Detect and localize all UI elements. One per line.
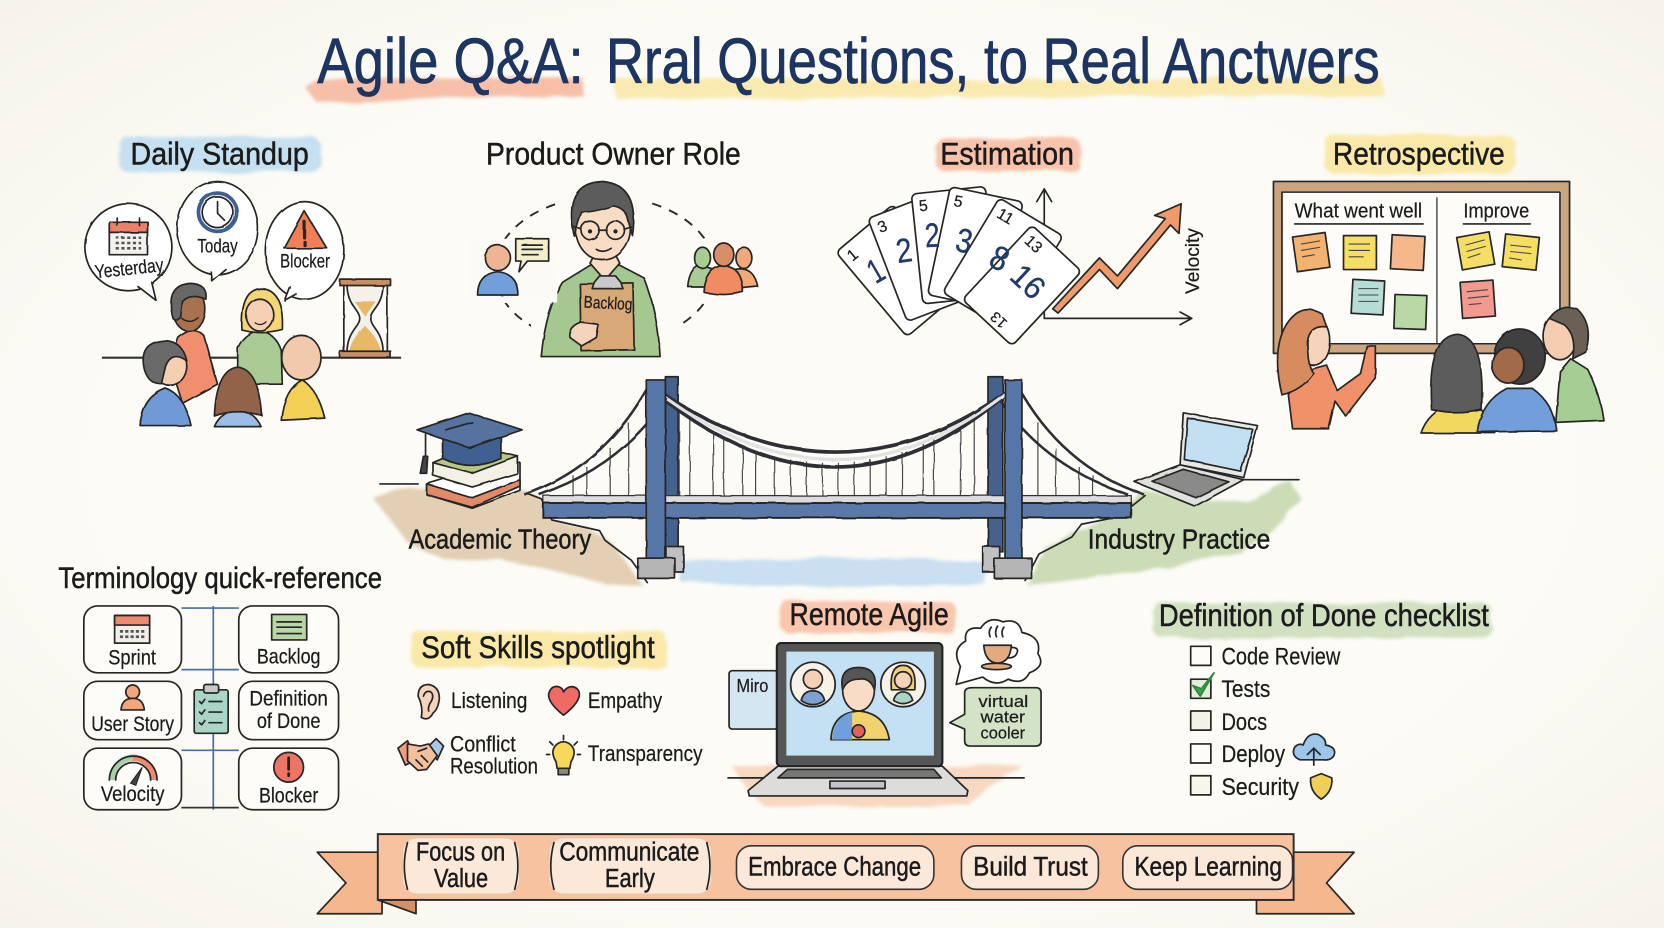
card 3: [911, 186, 997, 304]
title: [306, 26, 1386, 104]
term: Sprint: [84, 606, 181, 673]
icon: graduation cap on books: [417, 413, 522, 508]
heading highlight: [1154, 603, 1491, 638]
retro team: [1278, 307, 1604, 433]
pill: Keep Learning: [1123, 846, 1293, 889]
title highlight: orange: [306, 76, 584, 104]
cables: [649, 384, 1017, 467]
card 6: [962, 225, 1082, 346]
term: Backlog: Backlog: [257, 645, 320, 668]
deck: [543, 496, 1131, 503]
front towers: [646, 380, 665, 558]
pill: Focus on Value: [403, 838, 519, 894]
participant: center: [831, 711, 889, 740]
term: Backlog: [239, 606, 339, 673]
panel: definition of done checklist: [1154, 597, 1491, 801]
thought bubble: coffee: [956, 620, 1041, 684]
callout: virtual water cooler: virtual: [978, 692, 1028, 711]
water: [679, 558, 987, 587]
skill: transparency: [547, 735, 703, 775]
table line: [102, 357, 401, 359]
desk wash: [732, 766, 1024, 807]
card 6: 13: [1021, 232, 1045, 257]
item: Deploy: [1191, 734, 1335, 768]
title text: first part: Agile Q&A:: [317, 26, 584, 97]
panel: product owner role: [467, 135, 766, 361]
heading: Soft Skills spotlight: Soft Skills spotlight: [421, 629, 655, 665]
bridge structure: [524, 377, 1144, 578]
pill: Focus on Value: Value: [434, 865, 488, 893]
term: Blocker: [239, 748, 339, 810]
panel: soft skills spotlight: [398, 629, 703, 779]
label: Transparency: Transparency: [588, 741, 703, 766]
item: Code Review: Code Review: [1221, 643, 1341, 670]
skill: empathy: [549, 686, 663, 715]
connector lines: [181, 606, 239, 810]
term: Sprint: Sprint: [108, 646, 156, 669]
heading: Terminology quick-reference: Terminology quick-reference: [58, 562, 382, 595]
icon: light bulb: [553, 742, 574, 768]
card 4: 5: [952, 193, 964, 211]
heading highlight: [780, 601, 955, 632]
heading: Daily Standup: Daily Standup: [131, 135, 309, 171]
item: Tests: Tests: [1221, 676, 1270, 703]
card numeral 5: 8: [984, 238, 1015, 280]
label: Listening: Listening: [451, 688, 527, 713]
card 3: 5: [918, 198, 929, 215]
icon: shield: [1311, 774, 1332, 799]
ribbon fold: left: [378, 900, 416, 914]
label: Velocity: Velocity: [1183, 228, 1204, 294]
laptop with video call: [748, 643, 968, 796]
item: Deploy: Deploy: [1221, 741, 1286, 768]
sticky notes: [1292, 232, 1539, 330]
stakeholder with chat bubble: [467, 239, 557, 302]
planning poker cards: [836, 186, 1082, 346]
heading highlight: [1324, 135, 1515, 174]
speech bubble: today: [177, 181, 258, 281]
heading highlight: [936, 138, 1080, 171]
heading: Definition of Done checklist: Definition of Done checklist: [1159, 597, 1489, 633]
heading: Product Owner Role: Product Owner Role: [486, 135, 741, 171]
pill: Build Trust: Build Trust: [973, 852, 1088, 882]
icon: cloud upload: [1293, 734, 1335, 760]
banner: agile values: [317, 834, 1354, 914]
card numeral 4: 3: [952, 221, 976, 262]
speech bubble: blocker: [265, 202, 344, 300]
panel: daily standup: [85, 135, 401, 427]
tool window: Miro: Miro: [736, 676, 768, 696]
label: Blocker: Blocker: [280, 251, 331, 272]
card 1: [836, 204, 964, 337]
ribbon tail: left: [317, 852, 382, 914]
velocity trend arrow: [1053, 204, 1181, 313]
card numeral 2: 2: [894, 231, 915, 271]
item: Code Review: [1191, 643, 1341, 670]
tool window: Miro: [729, 671, 778, 729]
callout: virtual water cooler: [950, 688, 1041, 746]
callout: virtual water cooler: water: [979, 708, 1026, 727]
icon: checklist clipboard: [194, 684, 228, 733]
callout: virtual water cooler: cooler: [981, 724, 1025, 743]
pill: Embrace Change: Embrace Change: [748, 852, 921, 882]
label: Empathy: Empathy: [588, 688, 663, 713]
heading: Estimation: Estimation: [940, 135, 1074, 171]
product owner figure: [531, 181, 679, 361]
icon: laptop on cliff: [1134, 413, 1258, 506]
panel: estimation: [836, 135, 1204, 346]
panel: retrospective: [1273, 135, 1604, 433]
laptop screen: [777, 643, 942, 766]
laptop base: [748, 766, 968, 796]
card 5: 11: [994, 205, 1017, 229]
pill: Build Trust: [961, 846, 1098, 889]
label: Backlog: Backlog: [583, 293, 633, 314]
term: User Story: [84, 681, 181, 740]
icon: hourglass: [340, 279, 391, 358]
term: Velocity: [84, 748, 181, 810]
card 2: [868, 192, 977, 322]
label: Resolution: Resolution: [450, 754, 538, 779]
card numeral 6: 16: [1003, 257, 1053, 306]
pill: Communicate Early: Communicate: [559, 839, 699, 867]
term: Definition of Done: Definition: [249, 688, 328, 711]
item: Security: [1191, 774, 1332, 801]
panel: terminology quick-reference: [58, 562, 382, 810]
term: Velocity: Velocity: [101, 783, 165, 806]
card 5: [943, 198, 1063, 331]
retro board: [1273, 181, 1570, 353]
panel: remote agile: [728, 596, 1041, 807]
label: Industry Practice: Industry Practice: [1088, 524, 1270, 555]
term cards: [84, 606, 339, 810]
desk lines: [728, 777, 1024, 779]
item: Tests: [1191, 673, 1270, 703]
speech bubble: yesterday: [85, 204, 172, 300]
card 4: [927, 187, 1023, 310]
pill: Keep Learning: Keep Learning: [1134, 852, 1282, 882]
right cliff: industry practice: [1027, 480, 1301, 586]
card 6: 13: [988, 308, 1011, 331]
card numeral 1: 1: [861, 252, 891, 291]
title highlight: yellow: [613, 76, 1386, 100]
heading highlight: [412, 631, 666, 668]
column heading: What went well: What went well: [1295, 201, 1422, 223]
ribbon body: [378, 834, 1294, 900]
card numeral 3: 2: [924, 217, 941, 255]
heading underlines: [1295, 223, 1530, 225]
title text: second part: Rral Questions, to Real Anctwers: [606, 26, 1380, 97]
term: Definition of Done: [239, 681, 339, 740]
icon: heart: [549, 686, 579, 715]
pill: Communicate Early: [550, 838, 711, 894]
stakeholder group: [679, 239, 766, 302]
term: Blocker: Blocker: [259, 784, 318, 807]
card 2: 3: [876, 218, 890, 237]
heading highlight: [119, 137, 320, 172]
item: Docs: Docs: [1221, 709, 1267, 736]
suspenders: [573, 411, 1093, 496]
board frame: [1278, 187, 1565, 349]
participant: left: [791, 662, 835, 707]
column heading: Improve: Improve: [1463, 201, 1529, 223]
rear towers: [665, 377, 678, 552]
velocity axes: [1037, 189, 1192, 325]
column divider: [1436, 197, 1438, 344]
heading: Remote Agile: Remote Agile: [790, 596, 949, 632]
people around table: [140, 283, 325, 427]
icon: ear: [418, 684, 439, 719]
skill: listening: [418, 684, 527, 719]
icon: handshake: [398, 739, 444, 770]
skill: conflict resolution: [398, 731, 538, 779]
term: User Story: User Story: [91, 713, 174, 736]
label: Conflict: Conflict: [450, 731, 516, 756]
term: Definition of Done: of Done: [257, 710, 320, 733]
dashed stakeholder loop: [495, 196, 715, 345]
left cliff: academic theory: [374, 488, 643, 586]
heading: Retrospective: Retrospective: [1333, 135, 1505, 171]
cliff edges: [380, 480, 1299, 583]
centerpiece: bridge between theory and practice: [374, 377, 1301, 587]
pill: Focus on Value: Focus on: [416, 839, 505, 867]
label: Academic Theory: Academic Theory: [409, 524, 591, 555]
pill: Communicate Early: Early: [605, 865, 655, 893]
label: Yesterday: Yesterday: [94, 255, 165, 283]
item: Security: Security: [1221, 774, 1300, 801]
participant: right: [881, 662, 925, 707]
label: Today: Today: [197, 237, 238, 258]
pill: Embrace Change: [736, 846, 934, 889]
ribbon tail: right: [1256, 852, 1354, 914]
card 1: 1: [844, 246, 862, 265]
item: Docs: [1191, 709, 1267, 736]
